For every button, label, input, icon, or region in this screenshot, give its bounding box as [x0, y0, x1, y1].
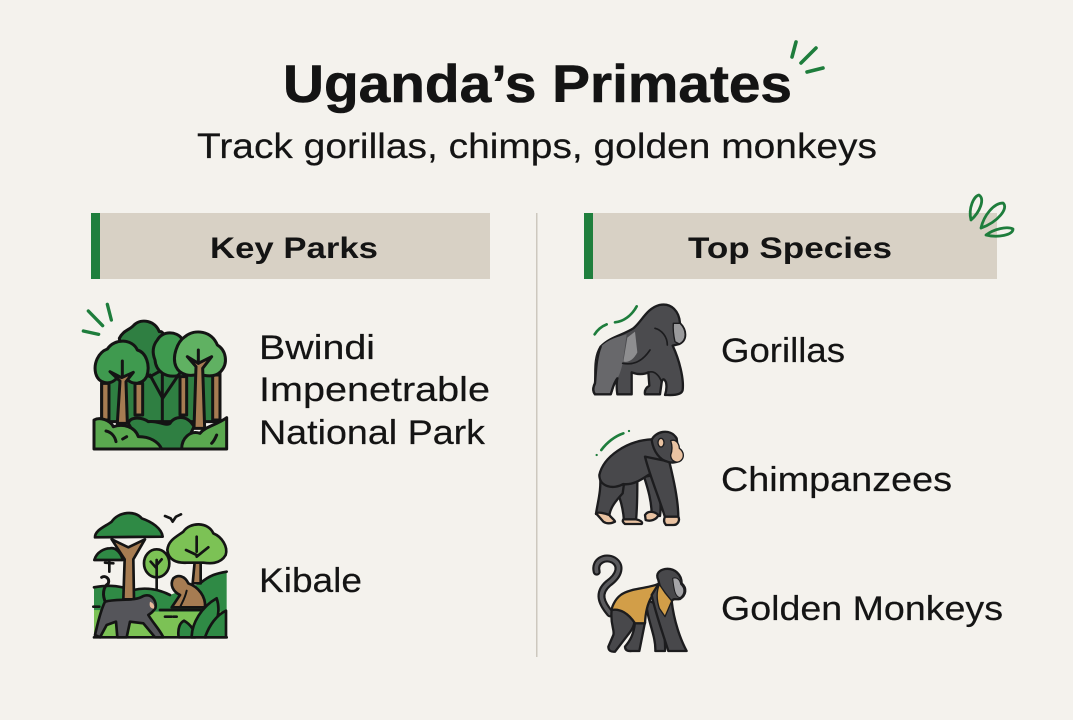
icon: leaf sparkle	[970, 195, 1013, 236]
heading: top species	[584, 213, 997, 279]
icon: chimpanzee	[595, 430, 683, 525]
icon: golden monkey	[596, 558, 687, 652]
panel: top species	[584, 195, 1013, 652]
icon: Kibale scene	[93, 513, 227, 637]
title: Uganda’s Primates	[283, 55, 792, 114]
heading: key parks: Key Parks	[210, 232, 378, 265]
label: Bwindi Impenetrable National Park	[259, 329, 490, 452]
label: Bwindi Impenetrable National Park: Bwindi	[259, 329, 375, 367]
label: Gorillas: Gorillas	[721, 332, 845, 370]
icon: gorilla	[593, 305, 685, 395]
heading: top species: Top Species	[688, 232, 892, 265]
label: Golden Monkeys: Golden Monkeys	[721, 590, 1003, 628]
label: Bwindi Impenetrable National Park: Impenetrable	[259, 371, 490, 409]
icon: forest	[83, 304, 227, 449]
subtitle: Track gorillas, chimps, golden monkeys	[197, 127, 877, 166]
icon: title sparkle	[792, 42, 823, 72]
label: Kibale: Kibale	[259, 562, 362, 600]
panel: key parks	[83, 213, 490, 637]
heading: key parks	[91, 213, 490, 279]
label: Chimpanzees: Chimpanzees	[721, 461, 952, 499]
label: Bwindi Impenetrable National Park: National Park	[259, 414, 486, 452]
